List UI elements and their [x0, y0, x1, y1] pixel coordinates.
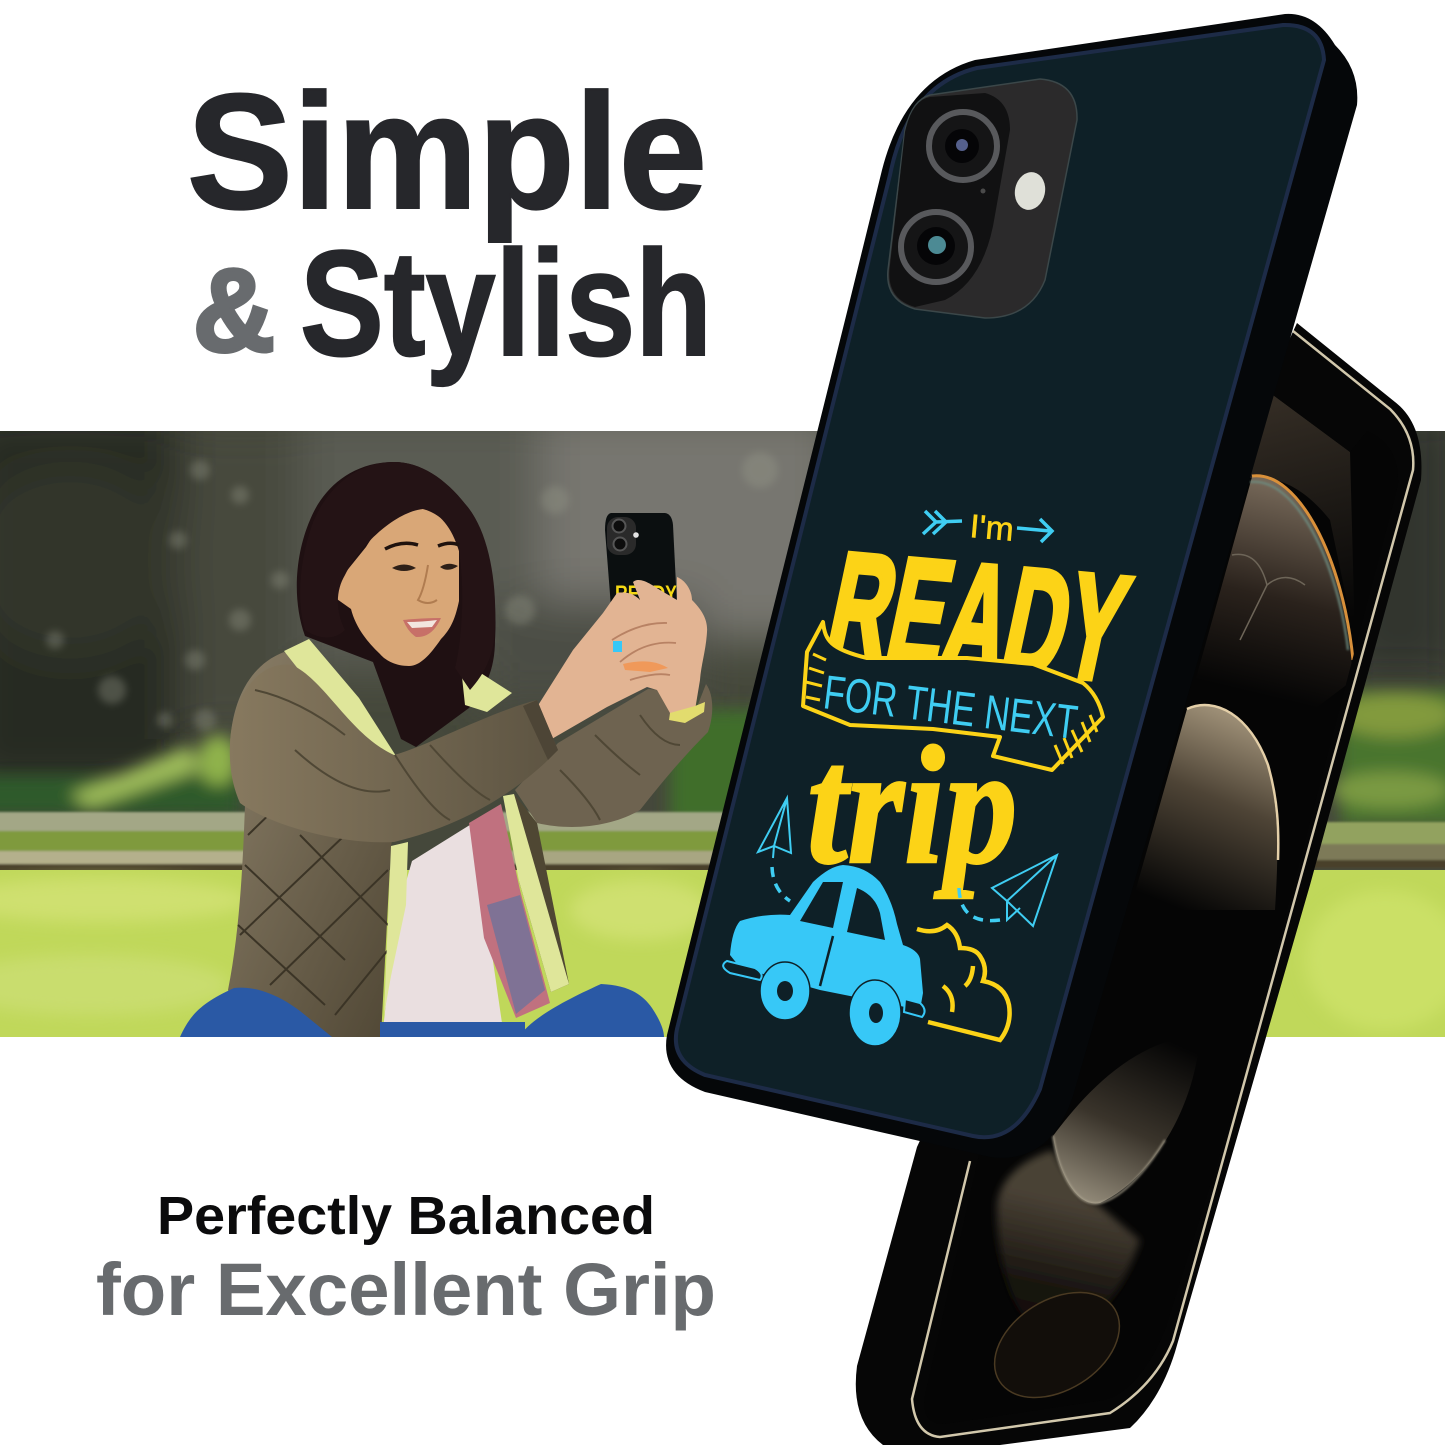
caption: Perfectly Balanced for Excellent Grip: Perfectly Balanced [157, 1186, 655, 1246]
I'm with arrows [923, 507, 1052, 548]
hair back [297, 462, 496, 747]
bumpers [723, 961, 925, 1017]
caption: Perfectly Balanced for Excellent Grip [96, 1186, 716, 1331]
face and neck [334, 508, 459, 666]
nose shadow [418, 565, 437, 603]
blurred green hedge [0, 690, 1445, 825]
blurred lawn and path [0, 812, 1445, 871]
upper brown glow [1250, 396, 1353, 580]
case body [666, 14, 1357, 1158]
eyes and brows [385, 543, 459, 549]
back phone showing the screen side [856, 320, 1440, 1445]
microphone dot [980, 188, 986, 194]
ribbon banner [803, 622, 1103, 770]
small phone in hand [605, 513, 677, 602]
blue rim and back face [676, 25, 1324, 1137]
gold phone frame [912, 331, 1413, 1437]
hair front fringe [334, 462, 496, 690]
ribbon hatching [806, 654, 1097, 764]
quilted jacket lines [238, 800, 388, 1015]
smallest ellipse [994, 1292, 1120, 1398]
star flare [1232, 554, 1305, 640]
wheels [760, 962, 810, 1020]
headline: Simple & Stylish: Simple [187, 60, 707, 243]
upper lens [929, 112, 997, 180]
paper plane left [758, 798, 791, 858]
hands [537, 577, 707, 740]
swirl wallpaper [993, 396, 1354, 1398]
near arm sleeve [230, 665, 558, 842]
jacket body [228, 652, 400, 1037]
exhaust cloud [917, 925, 1010, 1040]
caption: Perfectly Balanced for Excellent Grip: for Excellent Grip [96, 1248, 716, 1331]
FOR THE NEXT: FOR THE NEXT [821, 666, 1080, 750]
white shirt [383, 823, 503, 1030]
front phone case [666, 14, 1357, 1158]
flash [1011, 169, 1049, 213]
large gold swirl [1130, 705, 1277, 910]
wrist band [669, 702, 705, 723]
paper plane right [992, 855, 1057, 926]
blurred trees background [0, 410, 1445, 790]
READY: READY [815, 521, 1141, 712]
lime collar [284, 639, 569, 1015]
artwork: I'm ready for the next trip [723, 507, 1141, 1046]
small phone in hand: READY [615, 581, 677, 606]
headline: Simple & Stylish [187, 60, 712, 387]
smile [403, 618, 441, 637]
lower swirl tip [1053, 1049, 1194, 1204]
I'm with arrows: I'm [968, 507, 1015, 548]
dashed flight paths [772, 867, 1000, 921]
jeans [180, 984, 664, 1037]
camera island [888, 79, 1077, 318]
far arm sleeve [515, 684, 712, 827]
lower lens [901, 212, 971, 282]
headline: Simple & Stylish: & [193, 245, 275, 377]
upper sphere [1202, 477, 1352, 691]
lifestyle photo band [0, 410, 1445, 1037]
car [723, 865, 925, 1046]
plaid shirt [469, 804, 550, 1018]
headline: Simple & Stylish: Stylish [300, 219, 712, 387]
trip: trip [807, 712, 1017, 899]
bokeh highlights [46, 452, 778, 731]
woman taking a selfie [180, 462, 712, 1037]
faint lower glow [997, 1150, 1140, 1336]
